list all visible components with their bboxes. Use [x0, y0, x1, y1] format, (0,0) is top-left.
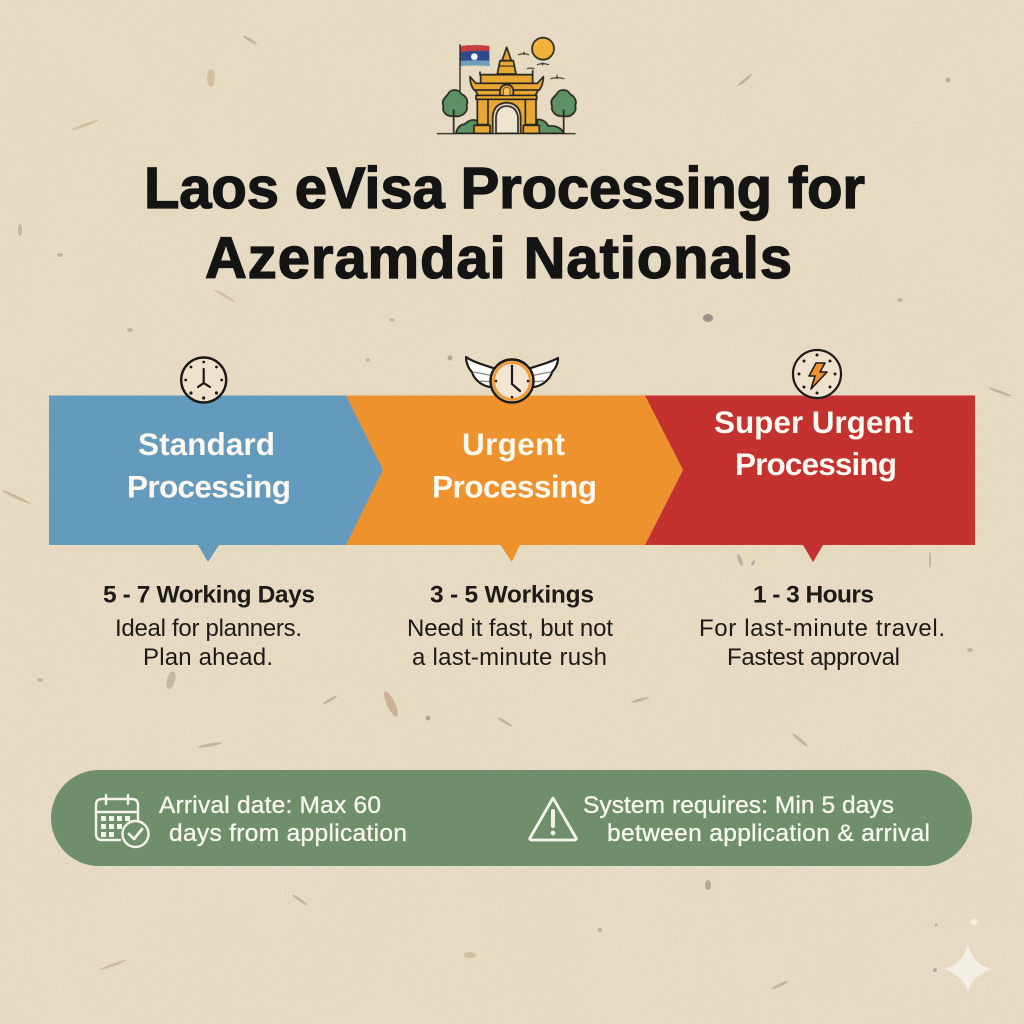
text block: super urgent details: Fastest approval: [727, 644, 900, 671]
text block: urgent details: Need it fast, but not: [407, 615, 613, 642]
title: [144, 156, 865, 291]
chevron band: super urgent segment: [645, 396, 975, 562]
band labels: [127, 404, 914, 504]
pointer: [500, 545, 520, 562]
icon: bushes: [456, 120, 477, 133]
text block: super urgent details: 1 - 3 Hours: [753, 582, 874, 608]
band labels: Standard: [138, 426, 275, 462]
title: Azeramdai Nationals: [205, 226, 792, 291]
icon: sparkle: [944, 944, 992, 992]
icon: gate monument: [470, 47, 543, 133]
text: arrival note: [159, 792, 407, 847]
icon: flag: [460, 45, 489, 91]
text block: urgent details: 3 - 5 Workings: [430, 582, 594, 608]
band labels: Processing: [735, 446, 897, 482]
pointer: [803, 545, 823, 562]
icon: warning triangle: [530, 798, 576, 840]
panel: notes pill: [51, 770, 972, 866]
icon: sun: [532, 38, 554, 60]
text block: standard details: [103, 582, 315, 671]
icon: calendar with check: [96, 795, 148, 847]
text block: super urgent details: [699, 582, 945, 671]
text block: super urgent details: For last-minute travel.: [699, 615, 945, 642]
text block: standard details: Ideal for planners.: [115, 615, 302, 642]
icon: winged clock: [466, 357, 558, 402]
chevron band: standard segment: [49, 396, 383, 562]
icon: left tree: [443, 90, 467, 133]
text block: standard details: 5 - 7 Working Days: [103, 582, 315, 608]
text block: urgent details: a last-minute rush: [412, 644, 607, 671]
icon: lightning clock: [793, 350, 841, 398]
icon: right tree: [551, 90, 576, 133]
band labels: Processing: [432, 468, 597, 504]
band labels: Processing: [127, 468, 291, 504]
icon: Laos landmark with flag and sun: [437, 38, 576, 134]
text: arrival note: days from application: [169, 820, 407, 847]
chevron band: urgent segment: [330, 396, 683, 562]
icon: birds: [519, 52, 564, 79]
text: arrival note: Arrival date: Max 60: [159, 792, 381, 819]
text block: standard details: Plan ahead.: [143, 644, 273, 671]
band labels: Urgent: [462, 426, 566, 462]
text: system note: System requires: Min 5 days: [583, 792, 894, 819]
text block: urgent details: [407, 582, 613, 671]
band labels: Super Urgent: [714, 404, 914, 440]
pointer: [198, 545, 219, 562]
ground line: [437, 132, 575, 136]
text: system note: [583, 792, 930, 847]
title: Laos eVisa Processing for: [144, 156, 865, 221]
icon: standard clock: [181, 358, 226, 402]
text: system note: between application & arrival: [607, 820, 930, 847]
